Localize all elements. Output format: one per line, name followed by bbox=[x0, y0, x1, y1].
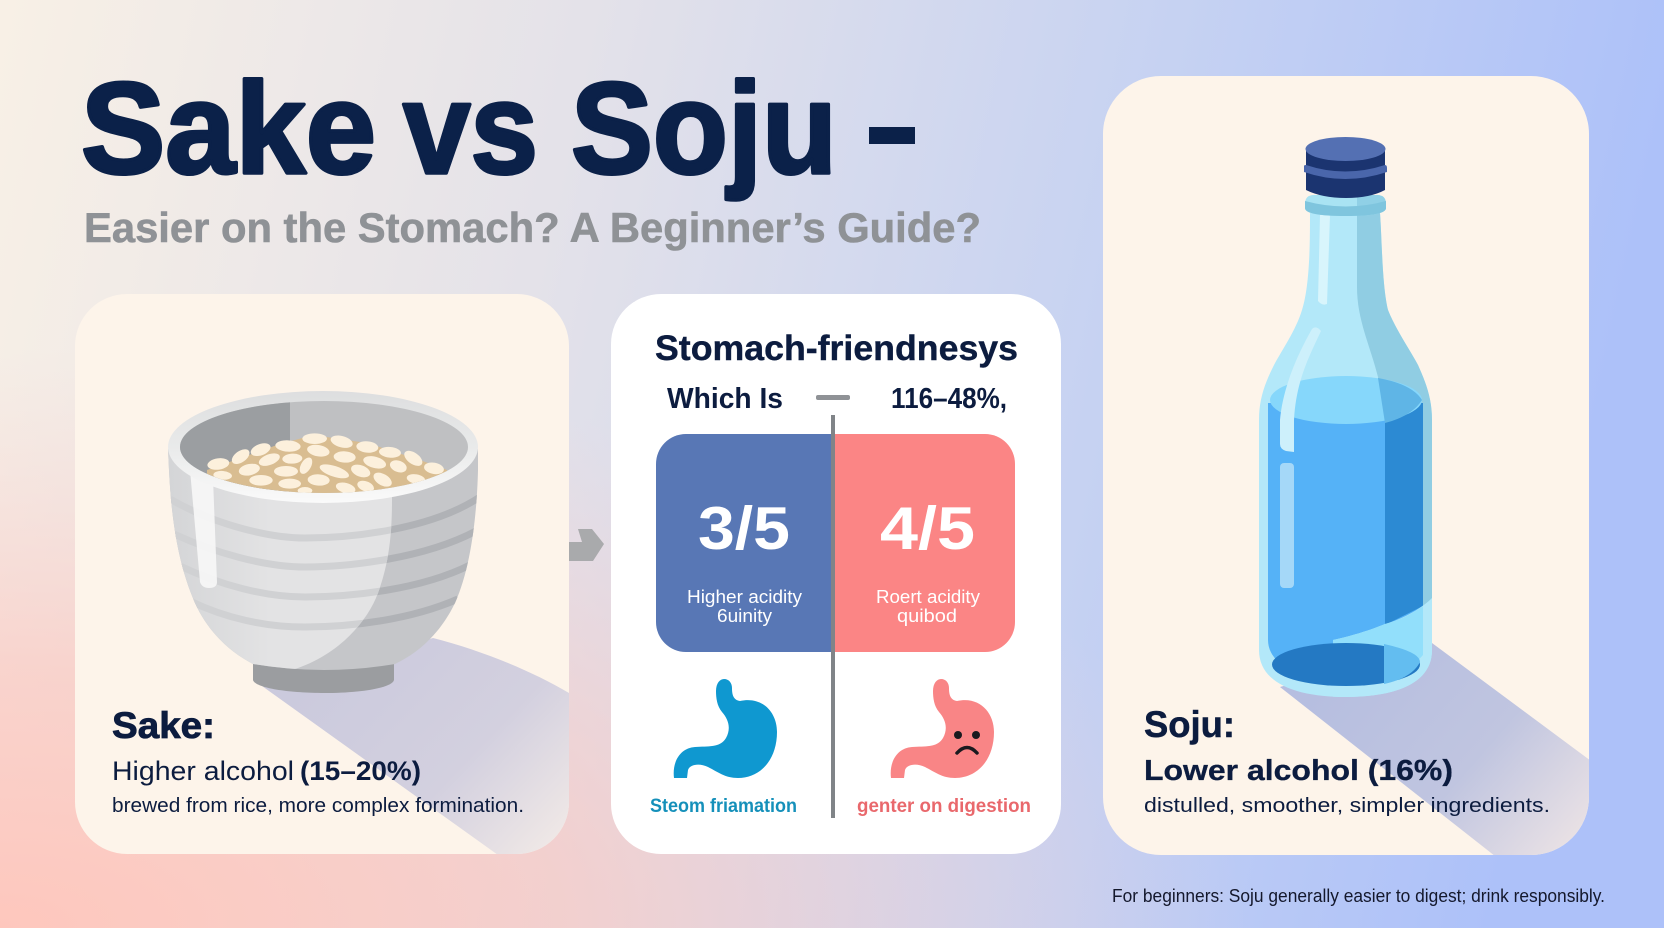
panel: sake bbox=[75, 294, 569, 860]
comparison header row: 116–48%, bbox=[891, 383, 1007, 415]
icon: blue stomach bbox=[674, 679, 777, 778]
score panel: soju bbox=[833, 434, 1015, 652]
icon: pink stomach with sad face bbox=[891, 679, 994, 778]
sake text: Sake: bbox=[112, 705, 215, 746]
panel: soju bbox=[1103, 76, 1595, 860]
footer note: For beginners: Soju generally easier to digest; drink responsibly. bbox=[1112, 886, 1605, 906]
score panel: soju: Roert acidity bbox=[876, 586, 981, 607]
caption: sake: Steom friamation bbox=[650, 796, 797, 817]
title: Soju bbox=[571, 55, 837, 201]
title: vs bbox=[403, 55, 538, 201]
sake text bbox=[112, 705, 524, 817]
divider line bbox=[831, 415, 835, 818]
comparison header row bbox=[667, 383, 1007, 415]
comparison header row: Which Is bbox=[667, 383, 783, 415]
bowl shadow bbox=[262, 638, 569, 860]
subtitle: Easier on the Stomach? A Beginner’s Guide? bbox=[84, 204, 981, 251]
icon: sake bowl with rice bbox=[160, 390, 480, 693]
title: Sake bbox=[81, 55, 376, 201]
arrow bbox=[569, 529, 604, 561]
panel: stomach-friendliness comparison bbox=[611, 294, 1061, 854]
sake text: brewed from rice, more complex formination. bbox=[112, 794, 524, 817]
soju text: distulled, smoother, simpler ingredients. bbox=[1144, 794, 1550, 817]
score panel: sake: 6uinity bbox=[717, 605, 773, 626]
sake text: (15–20%) bbox=[300, 756, 421, 786]
soju text: Soju: bbox=[1144, 704, 1235, 745]
sake text: Higher alcohol bbox=[112, 756, 294, 786]
score panel: sake bbox=[656, 434, 833, 652]
bottle shadow bbox=[1280, 643, 1595, 860]
score panel: soju: quibod bbox=[897, 605, 957, 626]
score panel: soju: 4/5 bbox=[880, 495, 975, 562]
icon: soju bottle bbox=[1259, 137, 1440, 700]
soju text bbox=[1144, 704, 1550, 817]
score panel: sake: 3/5 bbox=[698, 495, 790, 562]
score panel: sake: Higher acidity bbox=[687, 586, 803, 607]
panel heading: Stomach-friendnesys bbox=[655, 329, 1018, 368]
caption: soju: genter on digestion bbox=[857, 796, 1031, 817]
soju text: Lower alcohol (16%) bbox=[1144, 755, 1453, 787]
title bbox=[81, 55, 915, 201]
